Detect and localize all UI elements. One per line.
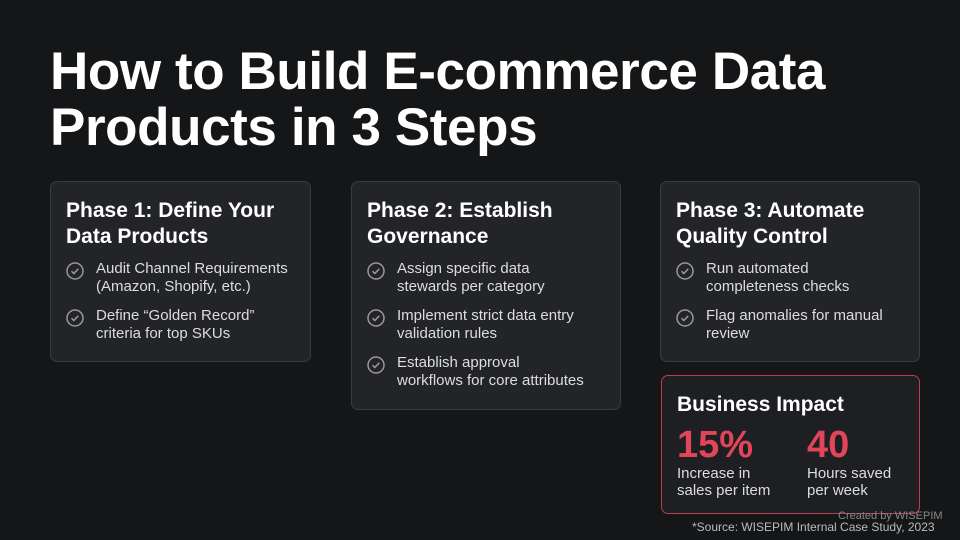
stat: 15%: Increase in xyxy=(677,465,750,482)
stat: 40 xyxy=(807,424,891,499)
stat: 40: Hours saved xyxy=(807,465,891,482)
stat: 15%: sales per item xyxy=(677,482,770,499)
bullet 1: stewards per category xyxy=(397,278,545,295)
panel: phase 2 xyxy=(351,181,621,410)
stat: 40: 40 xyxy=(807,424,849,466)
bullet 3 xyxy=(367,354,584,389)
bullet 2: Flag anomalies for manual xyxy=(706,307,883,324)
bullet 2: validation rules xyxy=(397,325,497,342)
bullet 1 xyxy=(367,260,545,295)
heading: phase 3: Phase 3: Automate Quality Control xyxy=(676,199,864,248)
bullet 3: workflows for core attributes xyxy=(397,372,584,389)
credit: Created by WISEPIM xyxy=(838,510,943,522)
heading: phase 1: Phase 1: Define Your Data Products xyxy=(66,199,274,248)
stat: 40: per week xyxy=(807,482,868,499)
panel: business impact xyxy=(661,375,920,514)
heading: business impact: Business Impact xyxy=(677,393,844,416)
bullet 2: criteria for top SKUs xyxy=(96,325,230,342)
title: Products in 3 Steps xyxy=(50,98,537,157)
panel: phase 3 xyxy=(660,181,920,362)
bullet 1: Audit Channel Requirements xyxy=(96,260,288,277)
bullet 1: Assign specific data xyxy=(397,260,530,277)
stat: 15% xyxy=(677,424,770,499)
bullet 2 xyxy=(676,307,883,342)
title: How to Build E-commerce Data xyxy=(50,42,825,101)
bullet 3: Establish approval xyxy=(397,354,520,371)
heading: phase 2: Phase 2: Establish Governance xyxy=(367,199,553,248)
bullet 2: Implement strict data entry xyxy=(397,307,574,324)
bullet 1: Run automated xyxy=(706,260,809,277)
bullet 1 xyxy=(66,260,288,295)
source note: *Source: WISEPIM Internal Case Study, 2023 xyxy=(692,520,935,534)
stat: 15%: 15% xyxy=(677,424,753,466)
bullet 2: Define “Golden Record” xyxy=(96,307,254,324)
title xyxy=(50,42,826,157)
panel: phase 1 xyxy=(50,181,311,362)
bullet 2: review xyxy=(706,325,749,342)
bullet 1: (Amazon, Shopify, etc.) xyxy=(96,278,251,295)
bullet 1 xyxy=(676,260,849,295)
bullet 1: completeness checks xyxy=(706,278,849,295)
bullet 2 xyxy=(367,307,574,342)
bullet 2 xyxy=(66,307,254,342)
